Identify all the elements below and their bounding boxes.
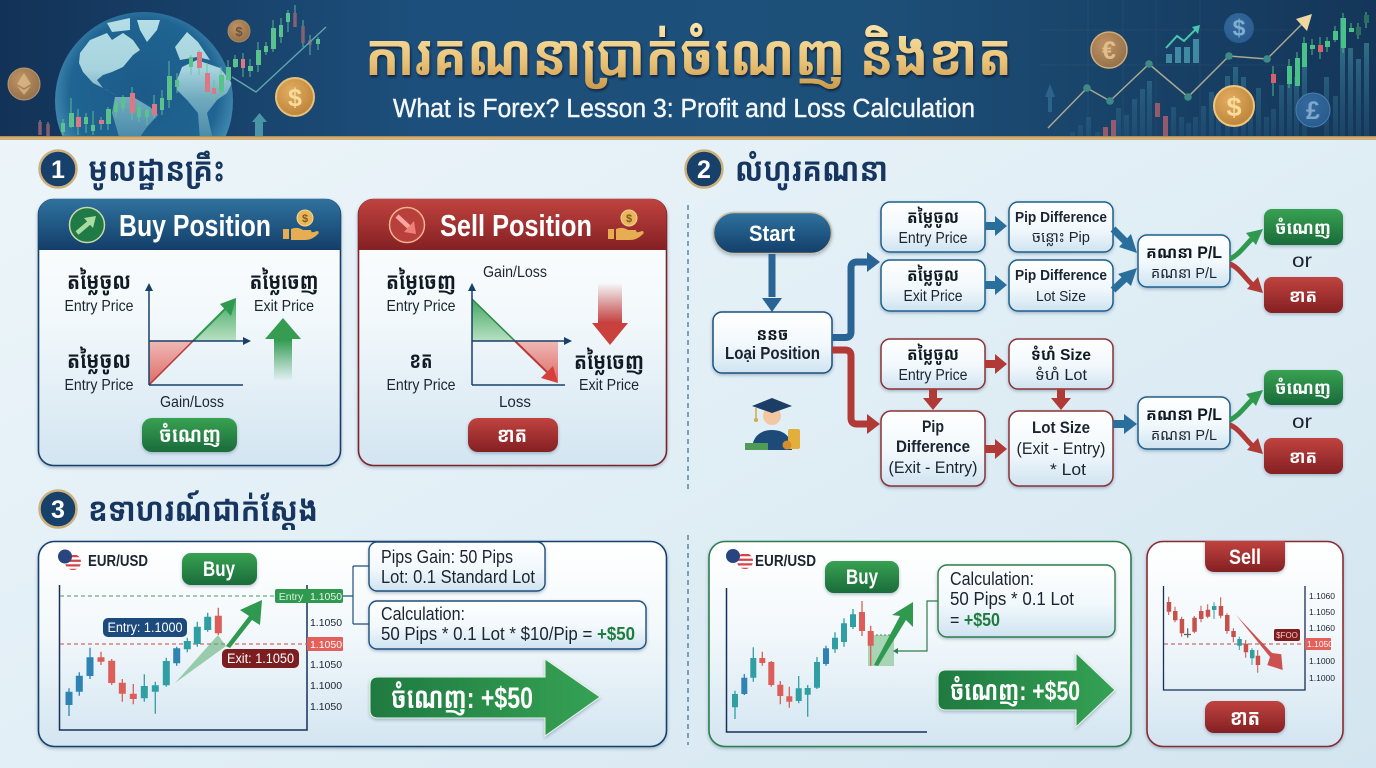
panel header: buy <box>38 199 340 250</box>
label: pair: EUR/USD <box>755 553 816 570</box>
flow box: position type: Loại Position <box>725 343 820 363</box>
flow box: calculate p/l bottom: គណនា P/L <box>1146 406 1222 424</box>
tab: sell: Sell <box>1229 546 1261 569</box>
icon: pound coin <box>1296 93 1330 127</box>
price axis labels: Entry <box>279 591 304 603</box>
arrow: down <box>592 283 628 345</box>
flow box: size <box>1009 339 1113 389</box>
panel: buy example with chart <box>38 542 666 746</box>
label: entry price top <box>64 267 134 315</box>
panel header: sell: Sell Position <box>440 208 592 243</box>
icon: large dollar coin: $ <box>288 84 302 112</box>
panel header: buy: $ <box>302 213 308 225</box>
flow box: pip difference gap: Pip Difference <box>1015 210 1107 226</box>
flow box: pip difference <box>881 411 985 486</box>
price axis labels: 1.1050 <box>310 701 342 713</box>
info box: pips and lot: Lot: 0.1 Standard Lot <box>381 567 535 587</box>
label: or: or <box>1292 412 1313 433</box>
arrow: position to sell branch <box>832 350 880 434</box>
flow box: exit price <box>881 260 985 311</box>
callout: calculation: 50 Pips * 0.1 Lot <box>950 589 1074 609</box>
badge: profit <box>142 418 237 452</box>
flowchart: calculation flow <box>688 202 1343 745</box>
price axis labels: 1.1050 <box>310 639 342 651</box>
label: exit price khmer, entry price: តម្លៃចេញ <box>386 267 456 296</box>
header banner <box>0 0 1376 140</box>
flow box: position type <box>713 312 832 373</box>
icon: graduate <box>745 398 800 450</box>
flow box: pip difference gap <box>1009 202 1113 252</box>
panel: sell position <box>358 199 666 466</box>
chart: buy profit diagram: Gain/Loss <box>160 394 224 411</box>
chart: sell diagram: Loss <box>499 394 531 411</box>
price axis labels: 1.1050 <box>1307 639 1333 649</box>
badge: loss: ខាត <box>497 424 527 447</box>
connector lines <box>343 566 369 624</box>
arrow: profit result: ចំណេញ: +$50 <box>950 675 1080 707</box>
flow box: lot size formula <box>1009 411 1113 486</box>
label: exit price <box>574 347 644 394</box>
icon: large dollar coin <box>276 78 314 116</box>
illustration: right market chart <box>1040 0 1369 136</box>
flow box: pip difference: Difference <box>896 437 970 456</box>
label: exit price <box>250 267 318 315</box>
info box: pips and lot: Pips Gain: 50 Pips <box>381 547 513 567</box>
flow box: pip difference gap: ចន្លោះ Pip <box>1032 229 1090 246</box>
label: stop tag: $FOO <box>1276 631 1298 640</box>
label: exit price: តម្លៃចេញ <box>250 267 318 296</box>
panel header: sell <box>358 199 666 250</box>
arrow: profit result <box>938 653 1115 727</box>
flow start <box>714 212 832 254</box>
section heading 2: 2 <box>697 156 711 184</box>
panel: buy position <box>38 199 340 466</box>
flow box: pip difference lot size <box>1009 260 1113 311</box>
panel header: sell: $ <box>626 213 632 225</box>
flow box: calculate p/l top: គណនា P/L <box>1146 244 1222 262</box>
icon: ethereum coin <box>8 68 40 100</box>
icon: pound coin: £ <box>1306 97 1320 125</box>
outcome: profit top: ចំណេញ <box>1275 217 1331 239</box>
panel header: buy: Buy Position <box>119 208 271 243</box>
badge: buy: Buy <box>846 566 878 589</box>
badge: profit: ចំណេញ <box>159 424 221 447</box>
icon: small dollar coin: $ <box>235 24 243 39</box>
flow box: entry price: តម្លៃចូល <box>907 205 959 228</box>
icon: small dollar coin <box>228 20 250 42</box>
price axis labels <box>1305 591 1335 683</box>
callout: calculation <box>938 565 1115 637</box>
tab: sell <box>1205 541 1285 572</box>
chart: buy profit diagram <box>145 283 251 411</box>
title: ការគណនាប្រាក់ចំណេញ និងខាត <box>365 23 1012 90</box>
icon: eur/usd flag <box>58 550 82 571</box>
flow box: calculate p/l bottom <box>1138 397 1230 449</box>
label: exit price khmer, entry price: Entry Price <box>386 298 456 315</box>
flow arrows: outcomes <box>1230 229 1263 454</box>
label: exit price: Exit Price <box>579 377 639 394</box>
price axis labels: 1.1050 <box>310 617 342 629</box>
panel: sell example <box>1147 541 1343 746</box>
label: entry price bottom: តម្លៃចូល <box>67 346 131 375</box>
badge: loss <box>1205 701 1285 733</box>
label: or: or <box>1292 251 1313 272</box>
flow box: lot size formula: Lot Size <box>1032 418 1090 437</box>
label: pair: EUR/USD <box>88 553 148 570</box>
callout: calculation: Calculation: <box>950 569 1034 589</box>
label: exit price: តម្លៃចេញ <box>574 347 644 376</box>
section heading 2 <box>686 150 888 190</box>
label: exit value: Exit: 1.1050 <box>227 651 294 666</box>
icon: eur/usd flag <box>726 549 754 570</box>
outcome: loss top <box>1264 277 1343 313</box>
flow box: lot size formula: * Lot <box>1050 460 1086 479</box>
outcome: profit bottom: ចំណេញ <box>1275 377 1331 399</box>
label: entry price top: Entry Price <box>64 298 134 315</box>
flow box: size: ទំហំ Size <box>1031 343 1091 364</box>
flow arrows: horizontal connectors <box>923 216 1137 459</box>
arrow: start to position <box>762 254 782 312</box>
flow box: sell entry price <box>881 339 985 389</box>
info box: calculation: Calculation: <box>381 604 465 624</box>
info box: pips and lot <box>369 542 545 591</box>
chart: eur/usd second <box>726 588 938 732</box>
flow box: position type: ននច <box>756 325 788 344</box>
panel: second buy example <box>709 542 1131 746</box>
section heading 1 <box>40 150 225 190</box>
label: loss, entry price: ខត <box>410 347 432 373</box>
badge: buy <box>182 553 257 585</box>
section heading 1: 1 <box>51 156 65 184</box>
outcome: profit top <box>1264 209 1343 245</box>
arrow: profit result <box>370 659 600 736</box>
outcome: loss bottom: ខាត <box>1289 447 1317 467</box>
icon: blue dollar coin <box>1224 13 1254 43</box>
price axis labels: 1.1060 <box>1309 591 1335 601</box>
badge: loss: ខាត <box>1230 705 1260 730</box>
label: exit price: Exit Price <box>254 298 314 315</box>
arrow: position to buy branch <box>832 252 880 338</box>
price axis labels <box>275 589 343 713</box>
label: entry value: Entry: 1.1000 <box>108 620 182 635</box>
info box: calculation: 50 Pips * 0.1 Lot * $10/Pip = +$50 <box>381 624 635 644</box>
flow box: sell entry price: Entry Price <box>898 367 968 384</box>
callout: calculation: = +$50 <box>950 610 1000 630</box>
arrow: up <box>265 318 301 381</box>
price axis labels: 1.1000 <box>1309 673 1335 683</box>
icon: blue dollar coin: $ <box>1233 15 1246 41</box>
flow box: size: ទំហំ Lot <box>1035 366 1088 384</box>
price axis labels: 1.1050 <box>1309 607 1335 617</box>
icon: gold dollar coin <box>1214 86 1254 126</box>
chart: eur/usd sell <box>1164 586 1335 690</box>
outcome: loss top: ខាត <box>1289 286 1317 306</box>
flow box: calculate p/l bottom: គណនា P/L <box>1151 427 1217 444</box>
section heading 3: ឧទាហរណ៍ជាក់ស្តែង <box>88 491 318 531</box>
badge: loss <box>468 418 558 452</box>
flow box: sell entry price: តម្លៃចូល <box>907 342 959 365</box>
flow box: exit price: Exit Price <box>904 288 962 305</box>
subtitle: What is Forex? Lesson 3: Profit and Loss Calculation <box>393 95 975 123</box>
section heading 3: 3 <box>51 496 65 524</box>
flow box: entry price <box>881 202 985 252</box>
section heading 1: មូលដ្ឋានគ្រឹះ <box>88 151 225 190</box>
flow box: lot size formula: (Exit - Entry) <box>1016 439 1106 458</box>
label: stop tag <box>1274 629 1300 641</box>
price axis labels: 1.1050 <box>310 659 342 671</box>
label: loss, entry price: Entry Price <box>386 377 456 394</box>
icon: gold dollar coin: $ <box>1226 92 1242 122</box>
info box: calculation <box>369 601 646 649</box>
flow box: exit price: តម្លៃចូល <box>907 263 959 286</box>
badge: buy: Buy <box>203 558 235 581</box>
flow box: calculate p/l top <box>1138 235 1230 287</box>
flow box: entry price: Entry Price <box>898 230 968 247</box>
price axis labels: 1.1060 <box>1309 623 1335 633</box>
arrow: profit result: ចំណេញ: +$50 <box>391 680 533 715</box>
icon: euro coin <box>1091 32 1127 68</box>
outcome: profit bottom <box>1264 370 1343 405</box>
price axis labels: 1.1000 <box>310 680 342 692</box>
outcome: loss bottom <box>1264 438 1343 474</box>
section heading 3 <box>40 490 318 531</box>
label: loss, entry price <box>386 347 456 394</box>
price axis labels: 1.1050 <box>310 591 342 603</box>
badge: buy <box>825 561 899 593</box>
flow start: Start <box>749 221 796 246</box>
chart: eur/usd buy <box>60 585 343 730</box>
flow box: calculate p/l top: គណនា P/L <box>1151 265 1217 282</box>
label: entry price bottom <box>64 346 134 394</box>
label: entry price bottom: Entry Price <box>64 377 134 394</box>
section heading 2: លំហូរគណនា <box>735 151 888 190</box>
flow box: pip difference: (Exit - Entry) <box>888 458 978 477</box>
chart: sell diagram <box>468 264 572 411</box>
label: entry price top: តម្លៃចូល <box>67 267 131 296</box>
label: exit price khmer, entry price <box>386 267 456 315</box>
flow box: pip difference lot size: Pip Difference <box>1015 268 1107 284</box>
flow box: pip difference: Pip <box>922 417 944 436</box>
flow box: pip difference lot size: Lot Size <box>1036 288 1086 305</box>
icon: euro coin: € <box>1102 37 1116 65</box>
price axis labels: 1.1000 <box>1309 656 1335 666</box>
illustration: globe with candles and coins <box>38 5 326 136</box>
chart: sell diagram: Gain/Loss <box>483 264 547 281</box>
